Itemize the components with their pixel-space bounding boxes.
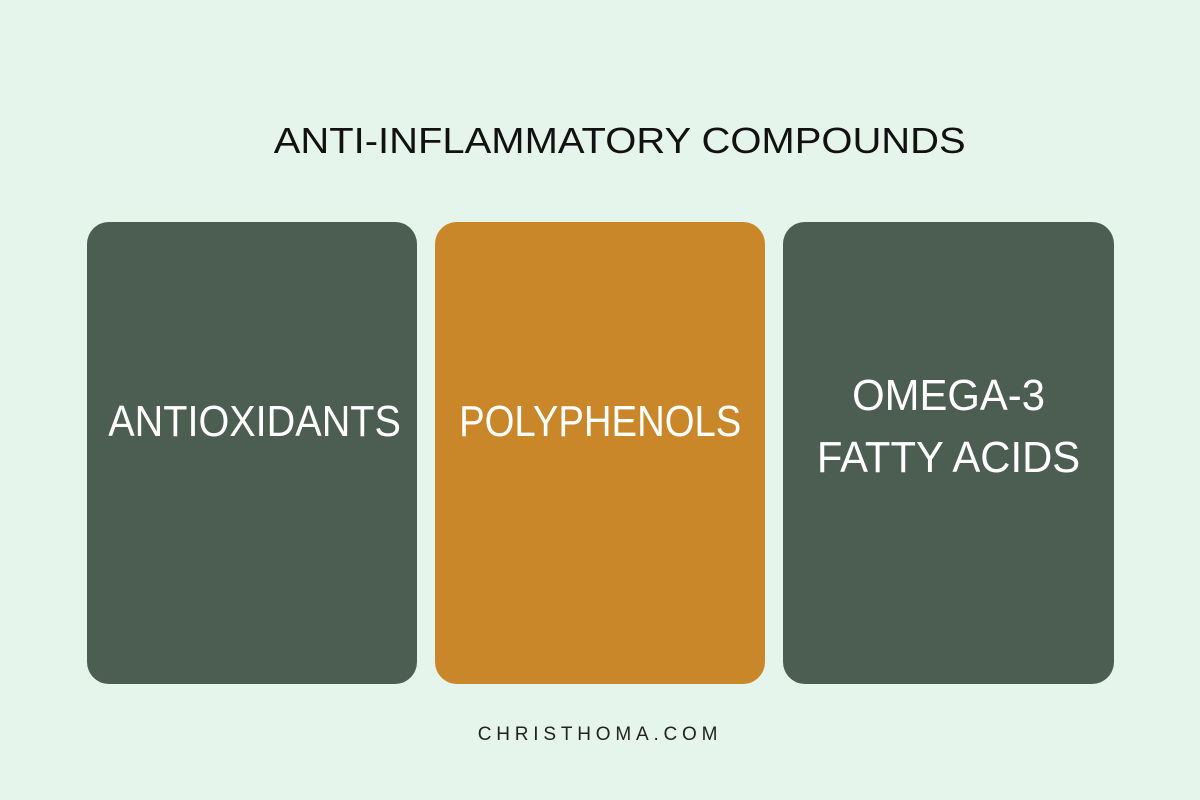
label: antioxidants: ANTIOXIDANTS xyxy=(109,397,401,446)
card: omega-3 fatty acids xyxy=(783,222,1114,684)
card: polyphenols xyxy=(435,222,765,684)
title: ANTI-INFLAMMATORY COMPOUNDS xyxy=(274,120,966,161)
label: omega-3 fatty acids xyxy=(817,371,1080,482)
label: omega-3 fatty acids: FATTY ACIDS xyxy=(817,433,1080,482)
label: polyphenols: POLYPHENOLS xyxy=(459,397,741,446)
card: antioxidants xyxy=(87,222,417,684)
footer: CHRISTHOMA.COM xyxy=(478,724,722,745)
label: omega-3 fatty acids: OMEGA-3 xyxy=(852,371,1045,420)
